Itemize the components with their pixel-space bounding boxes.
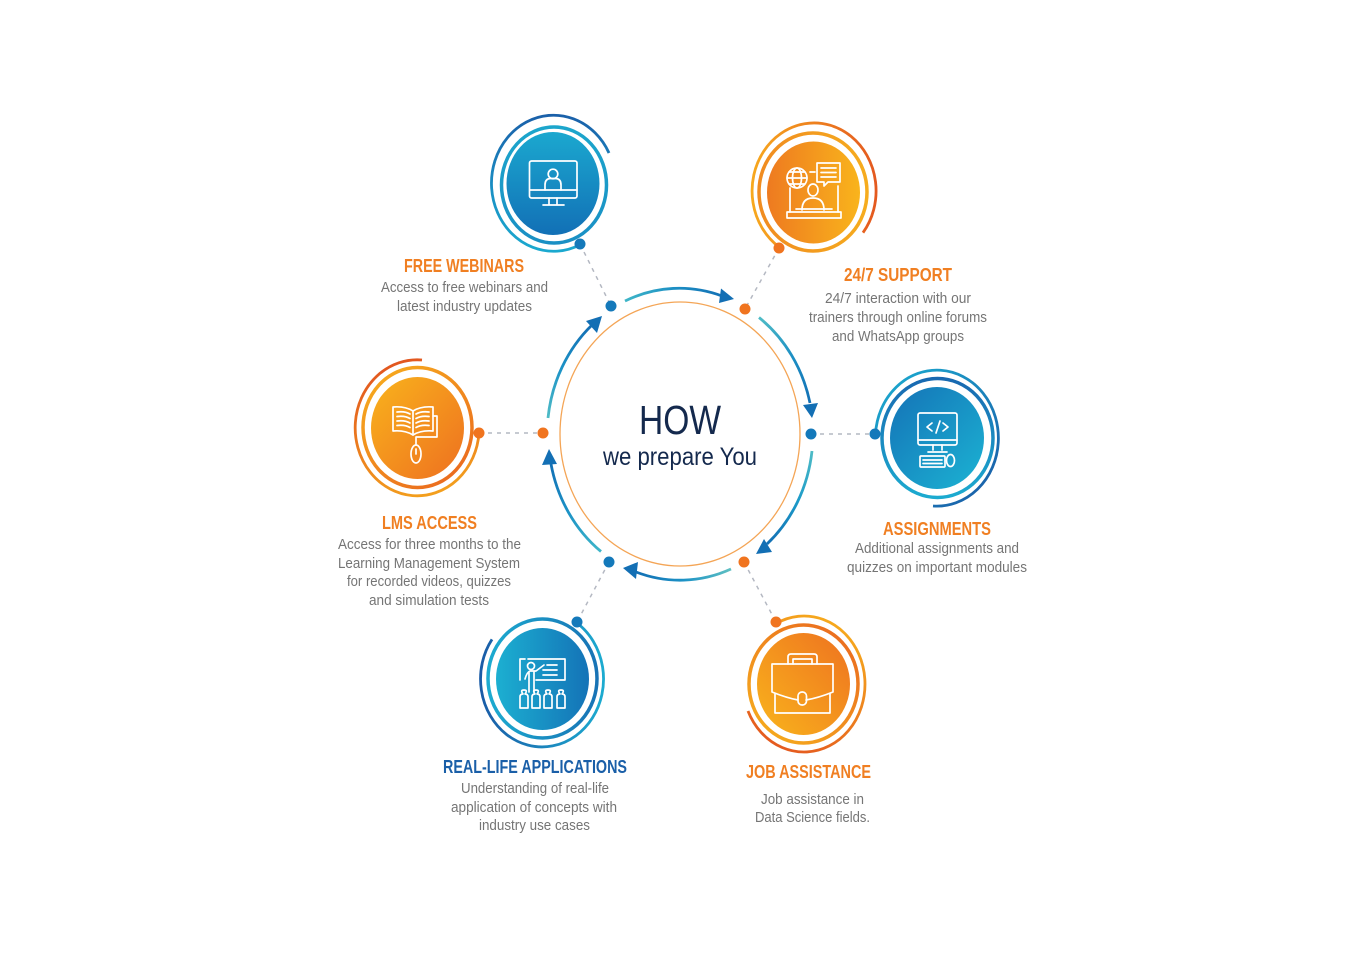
ring (749, 625, 858, 743)
ring (759, 133, 867, 251)
ring (502, 127, 606, 243)
ring (488, 619, 597, 738)
disc (371, 377, 464, 479)
inner node (538, 428, 548, 438)
description: Access for three months to the (338, 536, 521, 553)
inner node (740, 304, 750, 314)
outer node (774, 242, 784, 254)
description: Understanding of real-life (461, 780, 609, 797)
center circle (560, 302, 800, 566)
outer arc (491, 115, 609, 251)
arrow: lms access to free webinars (548, 316, 602, 418)
outer arc (752, 123, 876, 247)
arrow: real-life applications to lms access (542, 449, 601, 552)
description: Job assistance in (761, 791, 864, 808)
outer arc (748, 616, 865, 752)
outer node (574, 238, 586, 250)
heading: LMS ACCESS (382, 513, 477, 533)
description: Data Science fields. (755, 809, 870, 826)
disc (890, 387, 984, 489)
panel: real-life applications (443, 556, 627, 834)
description (847, 540, 1027, 576)
outer arc (876, 370, 998, 506)
panel: job assistance (738, 556, 871, 826)
outer node (770, 616, 782, 628)
title: we prepare You (602, 443, 757, 471)
description: Learning Management System (338, 555, 520, 572)
connector dashed line (744, 562, 776, 622)
icon: online support (787, 163, 841, 218)
description: and simulation tests (369, 592, 489, 609)
panel: lms access (338, 360, 548, 609)
description: Access to free webinars and (381, 279, 548, 296)
arrow: support to assignments (759, 318, 818, 418)
outer arc (355, 360, 479, 496)
panel: free webinars (381, 115, 616, 315)
icon: book and mouse (393, 407, 437, 463)
inner node (806, 428, 816, 440)
arrow: assignments to job assistance (756, 451, 812, 554)
panel: assignments (806, 370, 1027, 576)
arrow: job assistance to real-life applications (623, 562, 731, 580)
heading: REAL-LIFE APPLICATIONS (443, 757, 627, 777)
description: 24/7 interaction with our (825, 290, 971, 307)
description: industry use cases (479, 817, 590, 834)
description: Additional assignments and (855, 540, 1019, 557)
heading: FREE WEBINARS (404, 256, 524, 276)
outer arc (481, 623, 604, 747)
connector dashed line (479, 432, 543, 434)
inner node (738, 556, 750, 568)
description: latest industry updates (397, 298, 532, 315)
description: application of concepts with (451, 799, 617, 816)
disc (496, 628, 589, 730)
connector dashed line (577, 562, 609, 622)
icon: briefcase (772, 654, 833, 713)
inner node (604, 556, 614, 568)
description: for recorded videos, quizzes (347, 573, 511, 590)
outer node (572, 616, 582, 628)
description: quizzes on important modules (847, 559, 1027, 576)
description (338, 536, 521, 609)
heading: ASSIGNMENTS (883, 519, 991, 539)
description: trainers through online forums (809, 309, 987, 326)
outer node (474, 428, 484, 438)
inner node (606, 300, 616, 312)
connector dashed line (811, 433, 875, 435)
icon: trainer and students (520, 659, 565, 708)
arrow: webinars to support (625, 288, 734, 303)
heading: JOB ASSISTANCE (746, 762, 871, 782)
title: HOW (639, 397, 721, 443)
heading: 24/7 SUPPORT (844, 265, 952, 285)
connector dashed line (745, 248, 779, 309)
icon: computer with code (918, 413, 957, 467)
description (381, 279, 548, 315)
description (809, 290, 987, 345)
description (755, 791, 870, 826)
description (451, 780, 617, 834)
disc (506, 132, 600, 235)
description: and WhatsApp groups (832, 328, 964, 345)
disc (767, 142, 860, 244)
connector dashed line (580, 244, 611, 306)
icon: monitor with person (530, 161, 577, 205)
panel: 24/7 support (740, 123, 987, 345)
outer node (870, 428, 880, 440)
ring (363, 368, 472, 488)
disc (757, 633, 850, 735)
title (602, 397, 757, 471)
ring (882, 378, 993, 498)
